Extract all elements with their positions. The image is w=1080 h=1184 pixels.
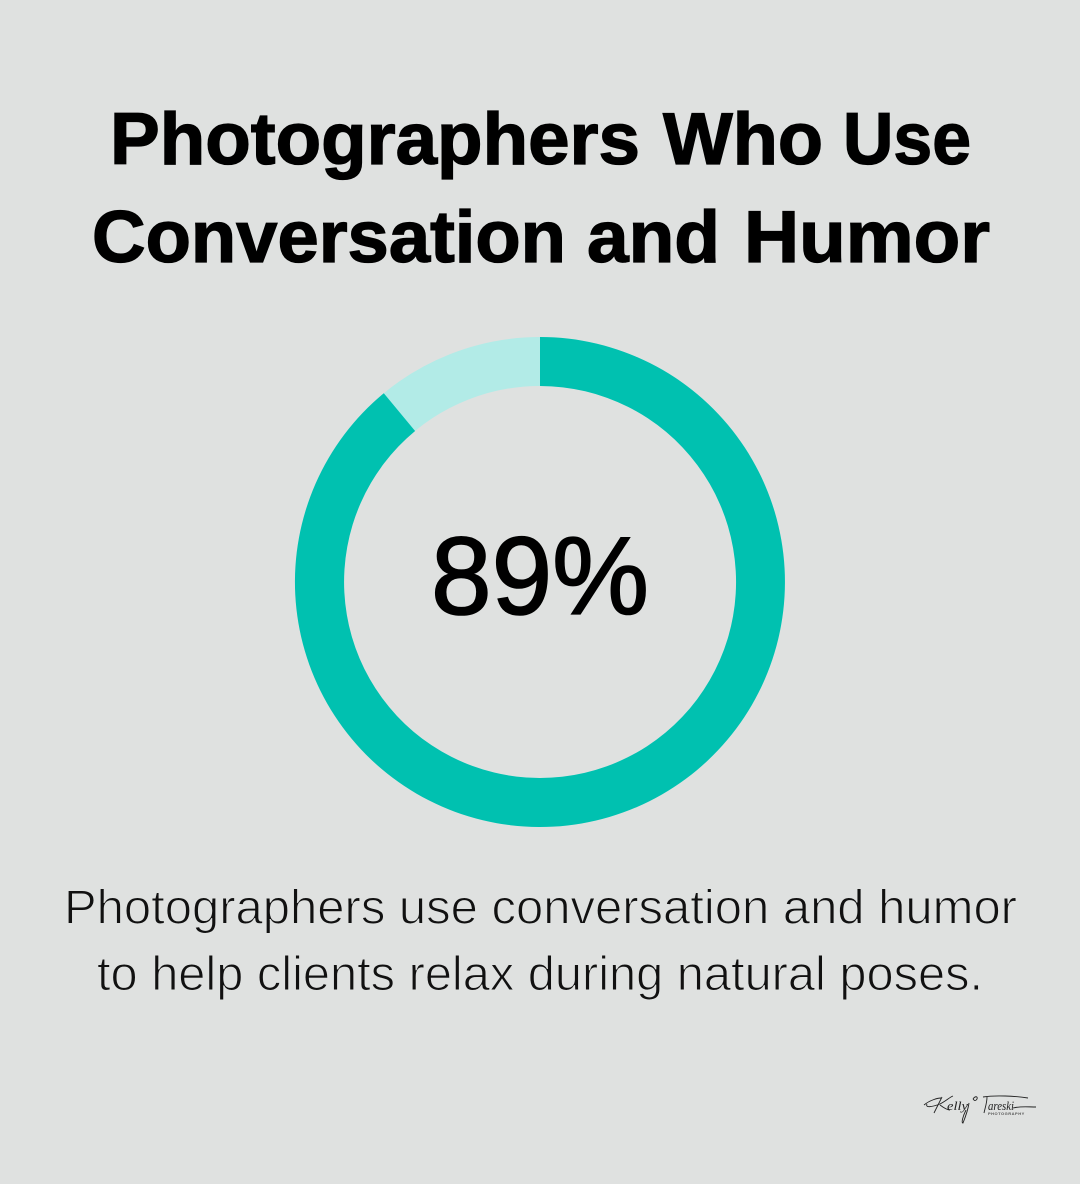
ring track: remaining 11% <box>320 362 760 802</box>
description text <box>64 882 1017 1001</box>
title: Use <box>843 99 971 180</box>
description text: Photographers use conversation and humor <box>64 882 1017 934</box>
description text: to help clients relax during natural poses. <box>97 948 983 1001</box>
ring value: 89% <box>295 337 785 827</box>
logo name: Tareski: areski <box>988 1098 1014 1113</box>
donut chart: 89% <box>295 337 785 827</box>
logo: signature <box>924 1096 1036 1123</box>
title <box>92 99 990 278</box>
logo subtitle: PHOTOGRAPHY <box>988 1111 1025 1116</box>
title: and <box>587 197 720 278</box>
center value: 89% <box>431 515 649 638</box>
logo flourishes <box>924 1096 1036 1123</box>
title: Photographers <box>110 99 640 180</box>
logo name: Kelly: elly <box>947 1098 968 1113</box>
title: Conversation <box>92 197 566 278</box>
title: Who <box>663 99 823 180</box>
title: Humor <box>744 197 990 278</box>
